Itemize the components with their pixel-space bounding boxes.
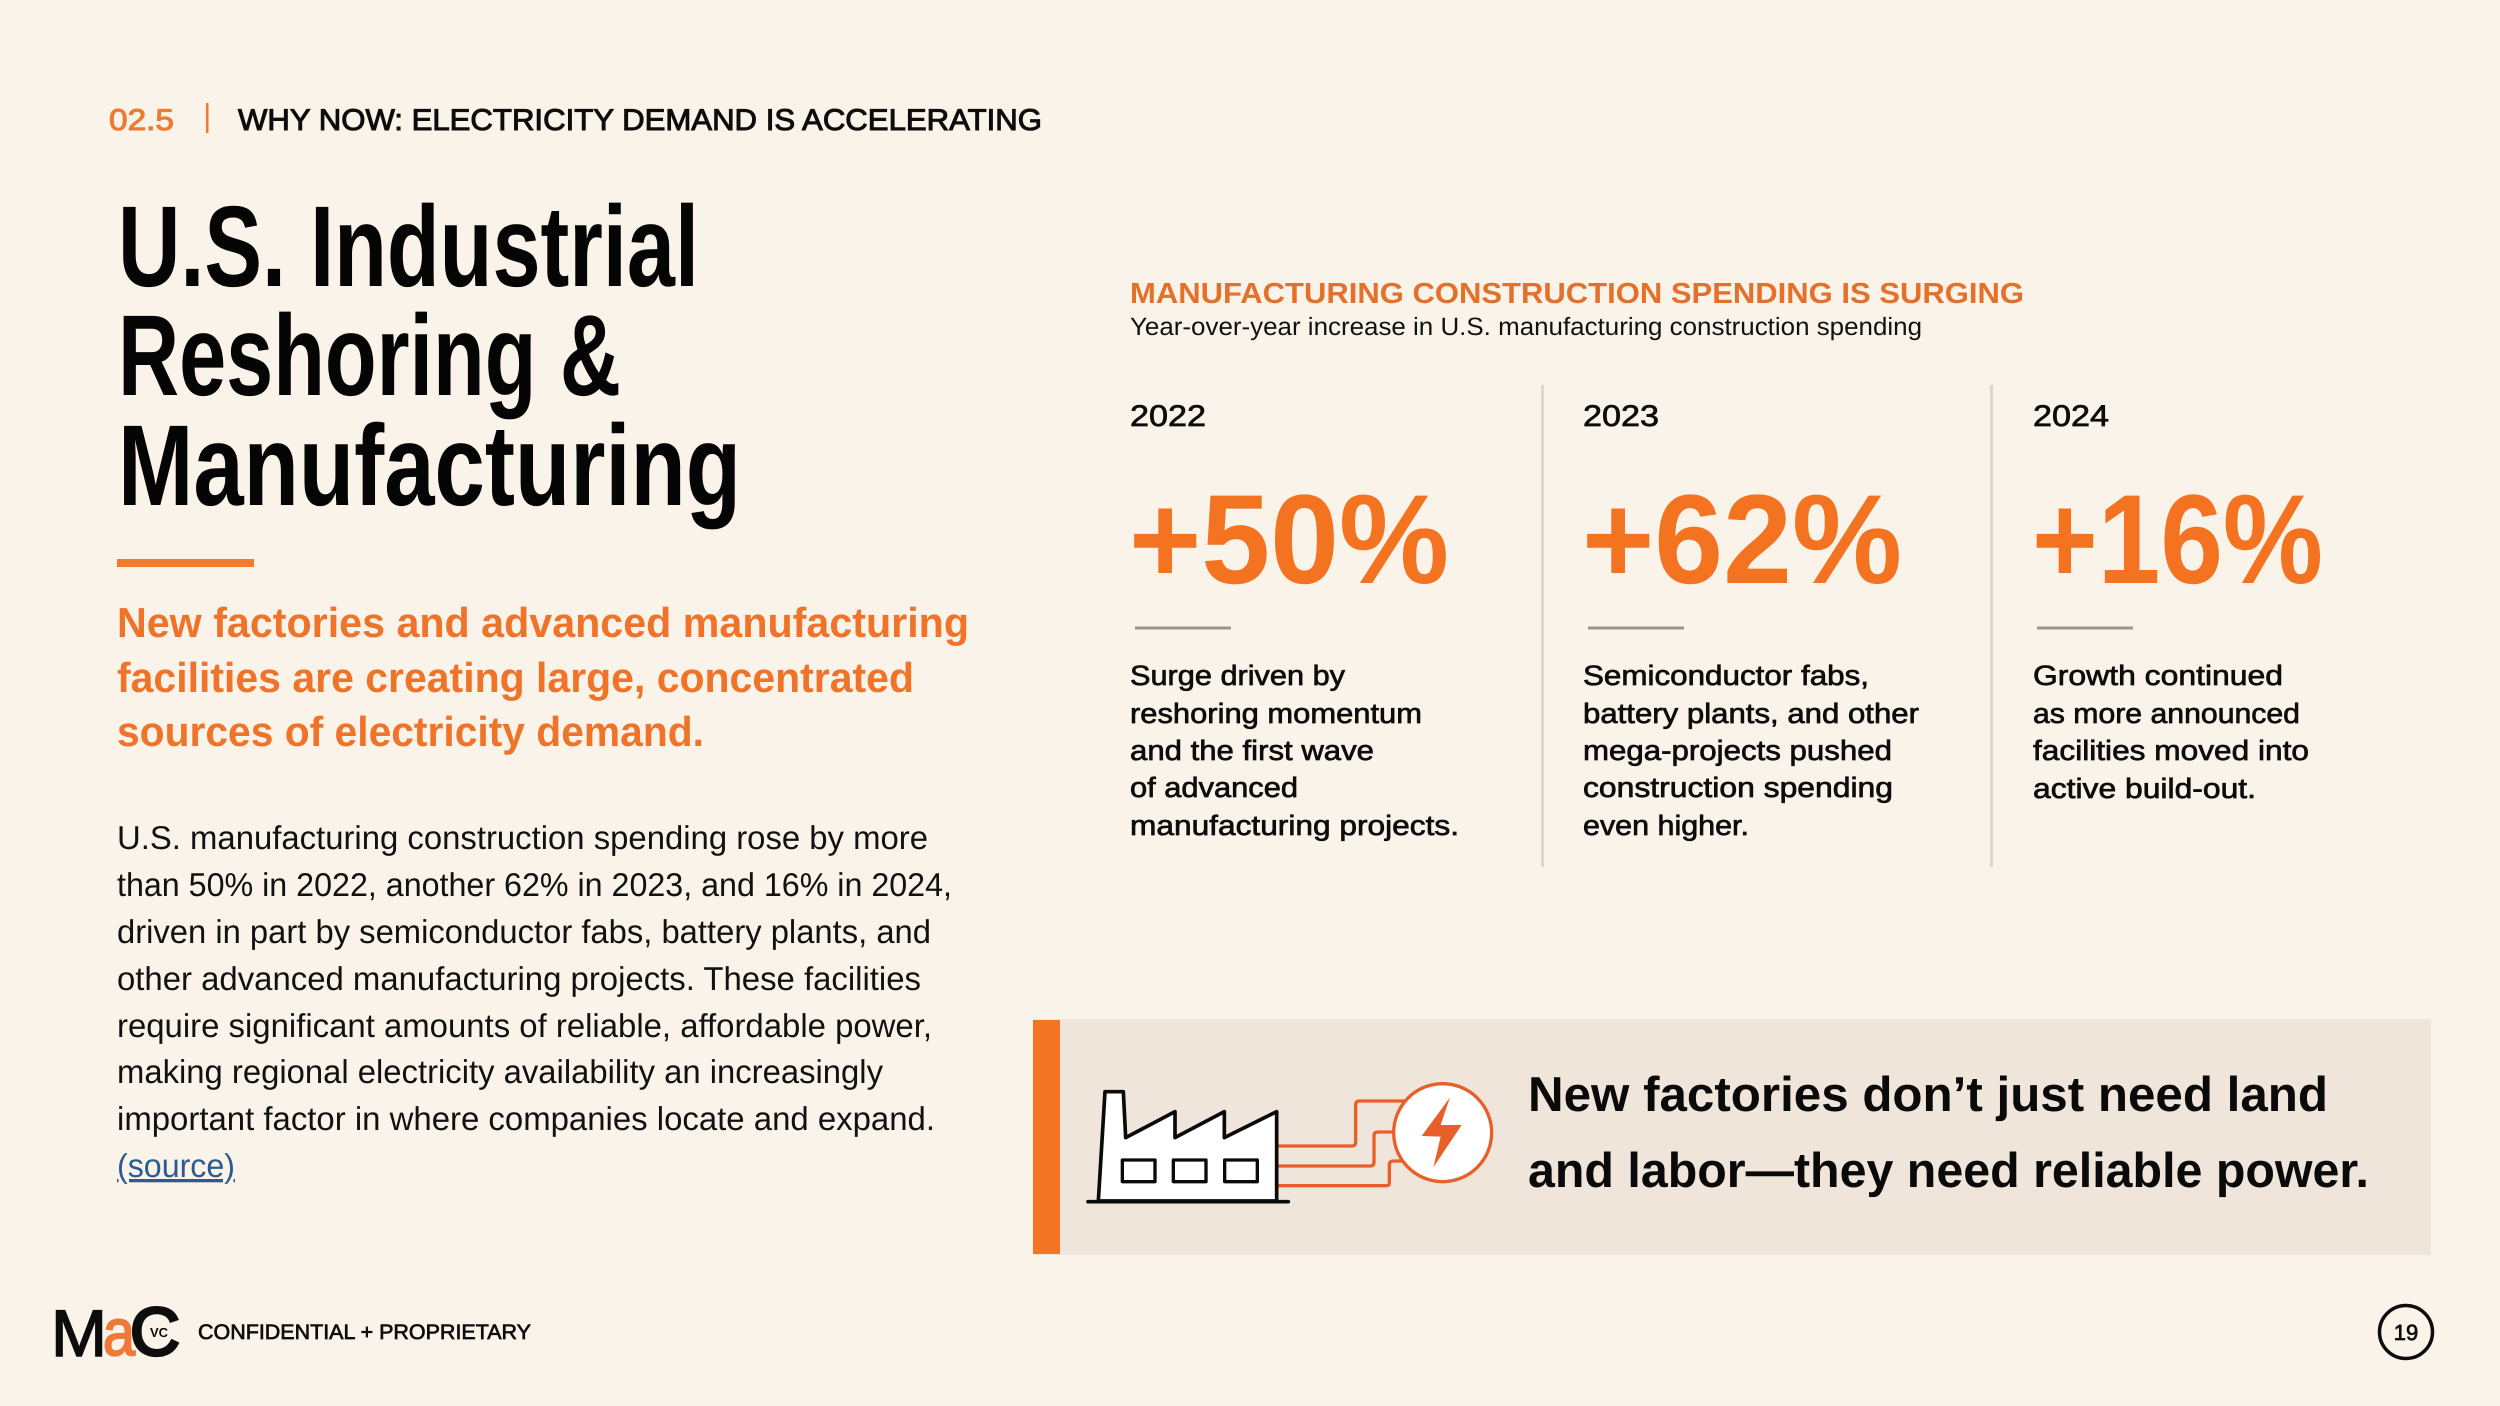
divider	[1541, 385, 1544, 867]
body paragraph: other advanced manufacturing projects. These facilities	[117, 960, 921, 997]
column: 2022: Surge driven by	[1130, 660, 1345, 691]
column: 2023: construction spending	[1583, 772, 1893, 803]
chart heading: MANUFACTURING CONSTRUCTION SPENDING IS SURGING	[1130, 278, 2024, 310]
body paragraph: than 50% in 2022, another 62% in 2023, and 16% in 2024,	[117, 866, 952, 903]
column: 2023: Semiconductor fabs,	[1583, 660, 1869, 691]
section kicker: 02.5	[109, 104, 174, 137]
callout panel	[1033, 1019, 2431, 1255]
column: 2022	[1129, 400, 1459, 841]
logo: MaC VC: VC	[150, 1325, 169, 1340]
column: 2024: Growth continued	[2033, 660, 2283, 691]
column: 2024: active build-out.	[2033, 773, 2256, 804]
body paragraph: making regional electricity availability an increasingly	[117, 1053, 883, 1090]
chart subheading: Year-over-year increase in U.S. manufacturing construction spending	[1130, 313, 1922, 341]
logo: MaC VC: C	[130, 1294, 180, 1370]
column: 2022: and the first wave	[1130, 735, 1374, 766]
callout text: New factories don’t just need land	[1528, 1068, 2328, 1122]
body paragraph: U.S. manufacturing construction spending rose by more	[117, 819, 928, 856]
column: 2023	[1582, 400, 1919, 841]
column: 2022: 2022	[1130, 400, 1206, 433]
column: 2024: +16%	[2032, 468, 2323, 610]
column: 2022: +50%	[1129, 468, 1449, 610]
footer confidentiality note: CONFIDENTIAL + PROPRIETARY	[198, 1321, 531, 1344]
column: 2023: mega-projects pushed	[1583, 735, 1892, 766]
callout text	[1528, 1068, 2369, 1198]
column: 2023: 2023	[1583, 400, 1659, 433]
column: 2024	[2032, 400, 2323, 804]
column: 2023: +62%	[1582, 468, 1902, 610]
section kicker: WHY NOW: ELECTRICITY DEMAND IS ACCELERATING	[238, 104, 1042, 137]
logo: MaC VC: a	[103, 1295, 135, 1369]
orange subheading	[117, 599, 969, 755]
divider	[1990, 385, 1993, 867]
body paragraph	[117, 819, 952, 1137]
column: 2022: manufacturing projects.	[1130, 810, 1459, 841]
callout text: and labor—they need reliable power.	[1528, 1144, 2369, 1198]
column: 2023: even higher.	[1583, 810, 1749, 841]
column: 2024: facilities moved into	[2033, 735, 2309, 766]
column: 2022: reshoring momentum	[1130, 698, 1422, 729]
column: 2022: of advanced	[1130, 772, 1298, 803]
body paragraph: require significant amounts of reliable, affordable power,	[117, 1007, 932, 1044]
orange subheading: facilities are creating large, concentrated	[117, 654, 914, 701]
logo: MaC VC	[51, 1294, 180, 1370]
page number	[2380, 1306, 2432, 1358]
title	[118, 183, 741, 530]
title accent rule	[117, 559, 254, 567]
title: U.S. Industrial	[118, 183, 699, 311]
column: 2024: as more announced	[2033, 698, 2300, 729]
page number: 19	[2394, 1320, 2418, 1345]
logo: MaC VC: M	[51, 1296, 107, 1370]
source link: (source)	[117, 1147, 235, 1184]
orange subheading: New factories and advanced manufacturing	[117, 599, 969, 646]
column: 2024: 2024	[2033, 400, 2109, 433]
orange subheading: sources of electricity demand.	[117, 708, 704, 755]
icon: factory connected to power	[1088, 1084, 1492, 1202]
title: Manufacturing	[118, 402, 741, 530]
body paragraph: driven in part by semiconductor fabs, battery plants, and	[117, 913, 931, 950]
title: Reshoring &	[118, 292, 621, 420]
body paragraph: important factor in where companies locate and expand.	[117, 1100, 935, 1137]
column: 2023: battery plants, and other	[1583, 698, 1919, 729]
